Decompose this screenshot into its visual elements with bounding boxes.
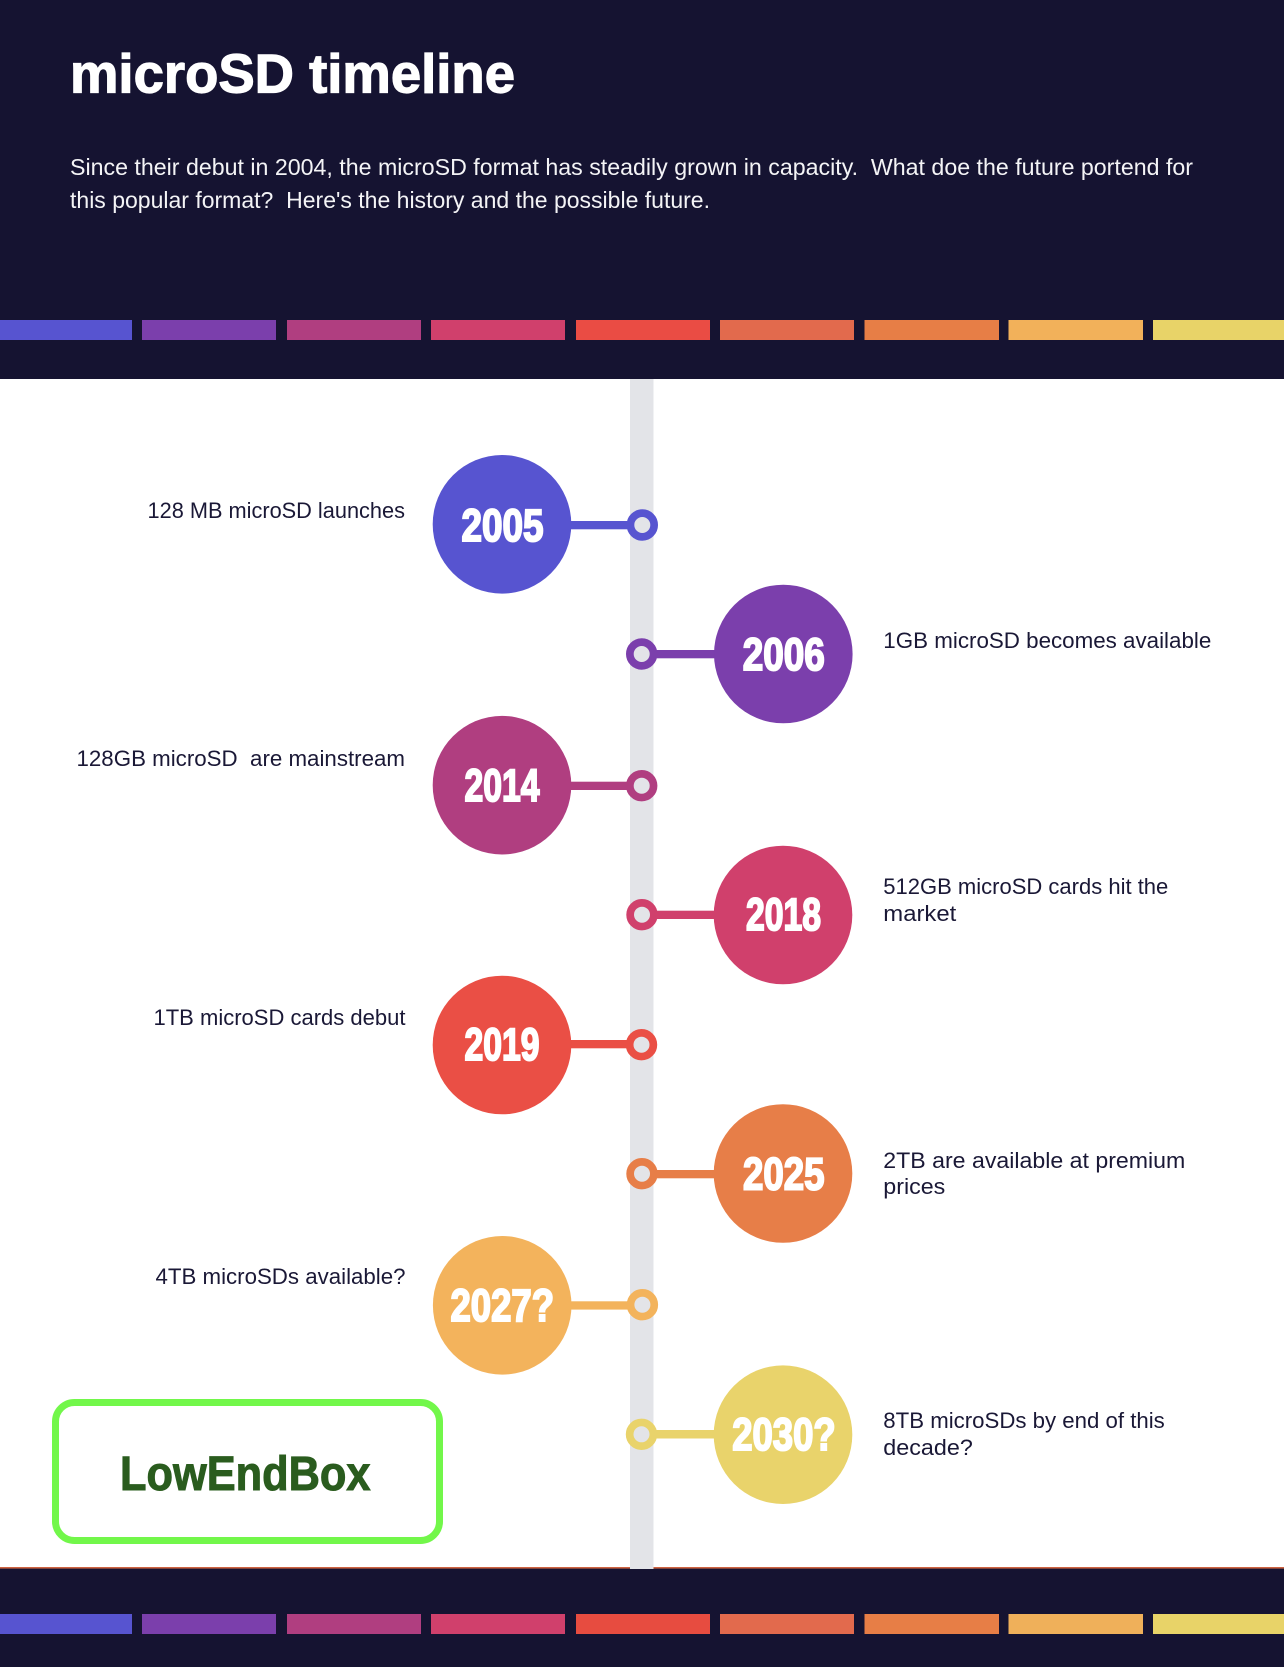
year label: 2019: 2019 bbox=[464, 1019, 540, 1070]
marker dot: 2005 bbox=[630, 513, 654, 537]
logo text: LowEndBox bbox=[120, 1448, 371, 1501]
year badge: 2006 bbox=[714, 585, 853, 723]
year label: 2014: 2014 bbox=[464, 760, 540, 811]
year label: 2018: 2018 bbox=[746, 889, 821, 940]
description: 2025: 2TB are available at premium bbox=[883, 1148, 1185, 1173]
year badge: 2018 bbox=[714, 846, 852, 984]
panel: footer bbox=[0, 1567, 1284, 1667]
year label: 2027?: 2027? bbox=[450, 1280, 554, 1331]
intro text: this popular format? Here's the history and the possible future. bbox=[70, 187, 710, 213]
timeline item: 2025 bbox=[630, 1104, 1185, 1243]
intro text bbox=[70, 154, 1193, 213]
year label: 2005: 2005 bbox=[462, 500, 544, 551]
year badge: 2019 bbox=[433, 976, 571, 1114]
title: microSD timeline bbox=[70, 42, 515, 104]
description: 2025: prices bbox=[883, 1174, 945, 1199]
description: 2018: market bbox=[883, 901, 956, 926]
timeline item: 2027? bbox=[156, 1236, 654, 1375]
marker dot: 2025 bbox=[630, 1162, 654, 1186]
description: 2027?: 4TB microSDs available? bbox=[156, 1264, 406, 1289]
timeline item: 2006 bbox=[630, 585, 1211, 723]
description: 2005: 128 MB microSD launches bbox=[148, 498, 405, 523]
year badge: 2025 bbox=[714, 1104, 852, 1243]
description: 2019: 1TB microSD cards debut bbox=[154, 1005, 406, 1030]
year label: 2006: 2006 bbox=[743, 629, 825, 680]
marker dot: 2014 bbox=[630, 774, 654, 798]
logo box: LowEndBox bbox=[56, 1402, 440, 1540]
panel: header bbox=[0, 0, 1284, 379]
year badge: 2014 bbox=[433, 716, 571, 854]
timeline item: 2019 bbox=[154, 976, 653, 1114]
year badge: 2027? bbox=[433, 1236, 572, 1375]
description: 2030? bbox=[883, 1408, 1165, 1460]
timeline item: 2005 bbox=[148, 455, 654, 594]
marker dot: 2018 bbox=[630, 903, 654, 927]
description: 2014: 128GB microSD are mainstream bbox=[76, 746, 405, 771]
timeline item: 2030? bbox=[630, 1365, 1165, 1504]
year label: 2025: 2025 bbox=[743, 1148, 824, 1200]
timeline item: 2014 bbox=[76, 716, 654, 854]
year badge: 2030? bbox=[714, 1365, 852, 1504]
marker dot: 2019 bbox=[630, 1033, 653, 1057]
intro text: Since their debut in 2004, the microSD format has steadily grown in capacity. What doe the future portend for bbox=[70, 154, 1193, 180]
marker dot: 2027? bbox=[631, 1293, 654, 1317]
year badge: 2005 bbox=[433, 455, 571, 594]
timeline spine bbox=[630, 379, 654, 1569]
description: 2018: 512GB microSD cards hit the bbox=[883, 874, 1168, 899]
marker dot: 2006 bbox=[630, 642, 654, 666]
description: 2018 bbox=[883, 874, 1168, 926]
timeline item: 2018 bbox=[630, 846, 1168, 984]
colour strip: bottom bbox=[0, 1614, 1284, 1634]
marker dot: 2030? bbox=[630, 1422, 653, 1446]
description: 2030?: decade? bbox=[883, 1435, 973, 1460]
colour strip: top bbox=[0, 320, 1284, 340]
description: 2025 bbox=[883, 1148, 1185, 1199]
description: 2030?: 8TB microSDs by end of this bbox=[883, 1408, 1165, 1433]
description: 2006: 1GB microSD becomes available bbox=[883, 628, 1211, 653]
year label: 2030?: 2030? bbox=[732, 1409, 836, 1460]
